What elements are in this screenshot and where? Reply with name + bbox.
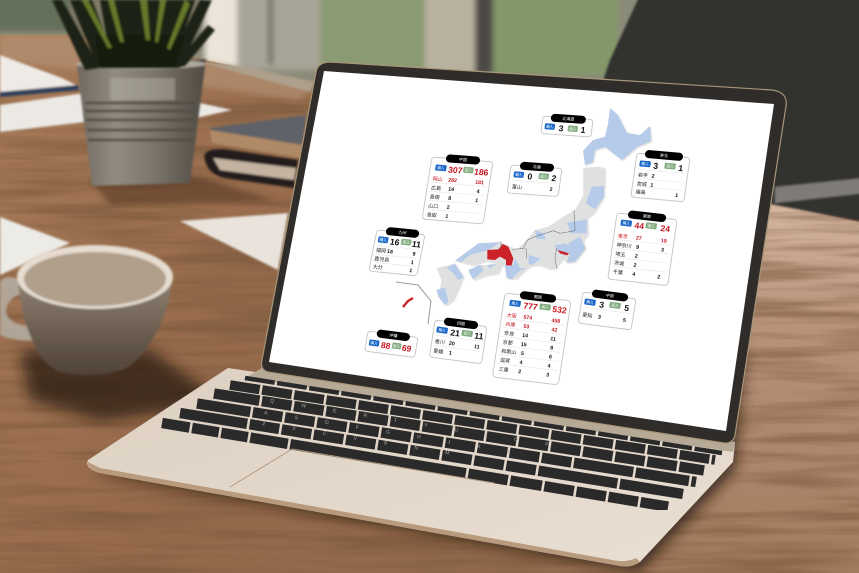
card: chugoku: 14 [448,187,454,193]
card: tohoku: 1 [675,193,678,199]
card: kanto: 返入 [647,223,656,229]
dark office chair [600,0,859,222]
card: kanto: 4 [632,272,636,278]
card: kyushu [369,226,426,276]
card: kanto [608,209,678,286]
card: okinawa: 88 [380,340,391,351]
card: kansai: 5 [520,351,524,357]
region borders [501,210,575,268]
card: tohoku: 東北 [660,152,668,158]
chugoku blue [455,243,500,262]
card: chugoku: 島根 [429,193,440,201]
card: chubu: 愛知 [582,311,593,320]
card: kanto: 購入 [622,220,631,226]
card: kansai: 関西 [534,293,543,300]
card: tohoku: 1 [650,183,654,189]
card: chubu: 3 [597,314,601,321]
card: chubu: 購入 [586,299,594,305]
card: shikoku: 返入 [463,330,471,336]
card: hokuriku: 2 [551,173,557,183]
card: kyushu: 9 [412,252,416,258]
card: kansai: 777 [523,300,539,312]
card: kansai: 574 [523,315,533,322]
card: hokuriku: 購入 [515,172,523,177]
card: hokkaido: 返入 [569,126,577,131]
card: chugoku: 岡山 [432,175,443,183]
card: okinawa: 返入 [393,343,401,349]
card: kansai: 14 [522,333,528,339]
card: tohoku: 購入 [641,161,649,167]
laptop lid [262,62,786,443]
coffee mug [0,245,230,420]
card: chubu: 5 [624,303,630,313]
trackpad outline [230,449,494,487]
card: hokkaido [541,113,593,137]
card: kyushu: 鹿児島 [374,255,390,264]
card: kansai: 兵庫 [505,321,516,329]
card: chugoku: 8 [448,196,452,202]
card: hokkaido: 購入 [546,124,554,129]
card: kansai: 奈良 [504,330,515,338]
card: kansai: 滋賀 [500,357,511,365]
card: chugoku: 2 [446,205,450,211]
card: kyushu: 返入 [402,239,411,245]
bright leaves [82,0,190,50]
chugoku red [487,244,513,265]
card: kansai: 4 [547,363,551,370]
card: kansai: 返入 [541,304,549,310]
hinge strip [245,368,735,452]
card: kyushu: 福岡 [375,247,387,255]
card: chubu: 5 [622,318,626,324]
card: okinawa: 購入 [370,340,379,346]
card: kansai: 2 [518,369,522,375]
card: okinawa: 69 [401,343,412,354]
card: chubu: 返入 [611,302,619,308]
card: tohoku: 福島 [635,188,646,196]
card: kanto: 19 [660,238,667,245]
card: kansai: 15 [520,342,527,348]
card: kyushu: 11 [411,239,422,250]
keyboard legends: QWERTYUIOP [270,398,576,452]
card: kanto: 千葉 [612,268,623,277]
card: shikoku: 香川 [434,338,445,346]
card: kansai: 京都 [502,340,513,347]
card: shikoku: 11 [474,344,480,351]
card: kanto: 2 [633,263,637,269]
dark leaves [52,0,215,70]
card: chugoku: 307 [447,165,463,176]
card: hokuriku [507,161,563,197]
card: chugoku: 4 [476,189,480,195]
card: kyushu: 大分 [372,263,383,271]
kanto north blue [567,219,587,233]
card: kansai: 三重 [498,366,509,374]
japan map [437,108,651,305]
laptop shadow on table [95,340,745,572]
card: kanto: 茨城 [614,259,625,268]
card: chugoku [422,153,494,224]
card: chugoku: 中国 [459,156,468,162]
card: kanto: 神奈川 [616,241,632,250]
card: hokuriku: 0 [527,171,533,182]
screen content [365,108,691,385]
card: okinawa: 沖縄 [389,331,398,338]
card: chugoku: 181 [475,180,484,186]
card: kanto: 9 [636,245,639,251]
card: kansai: 6 [548,354,552,361]
card: shikoku: 四国 [457,319,466,326]
card: hokkaido: 北海道 [562,115,575,122]
card: hokkaido: 3 [558,123,564,134]
card: okinawa [365,328,419,358]
card: shikoku: 20 [448,341,455,347]
card: kanto: 関東 [643,212,651,219]
tokai blue [555,243,571,255]
card: kansai: 42 [551,327,558,334]
plant in metal pot [52,0,275,205]
card: chubu [578,288,637,330]
card: kyushu: 購入 [379,237,388,243]
card: chugoku: 1 [475,198,479,204]
card: tohoku: 返入 [666,163,674,169]
card: shikoku: 11 [474,330,484,342]
card: hokuriku: 北陸 [533,163,541,170]
card: shikoku: 21 [450,327,461,338]
card: chugoku: 鳥取 [426,211,437,219]
card: tohoku [631,149,691,202]
keyboard [162,378,722,507]
inset frame line [396,282,431,324]
card: chugoku: 1 [445,214,449,220]
card: kansai: 購入 [511,300,519,306]
card: hokuriku: 2 [549,187,553,193]
kyushu [437,263,463,305]
card: chugoku: 山口 [428,202,439,210]
stacked notebooks [204,115,306,188]
card: kyushu: 九州 [398,229,407,235]
card: kyushu: 16 [389,237,401,247]
card: kansai: 8 [550,345,554,352]
kanto blue [567,237,586,263]
card: hokuriku: 富山 [512,183,522,191]
card: kansai: 3 [546,372,550,379]
card: kansai: 大阪 [506,312,517,320]
card: kansai: 4 [519,360,523,366]
card: shikoku: 購入 [438,327,446,333]
card: kansai: 458 [551,318,561,325]
card: kanto: 埼玉 [615,250,626,259]
background: blurred room and window [0,0,859,110]
card: kanto: 3 [661,247,664,254]
card: kyushu: 1 [409,268,413,274]
card: tohoku: 2 [651,174,655,180]
laptop base [87,368,735,566]
card: chugoku: 186 [473,167,489,178]
honshu [455,167,605,278]
tohoku blue [586,186,604,209]
shikoku [468,265,502,280]
card: kanto: 44 [634,220,645,231]
card: kanto: 東京 [617,232,628,241]
card: shikoku: 愛媛 [433,347,444,356]
papers on the desk [0,55,288,275]
card: chubu: 中部 [606,292,615,299]
card: kansai [492,289,572,385]
card: kansai: 和歌山 [501,348,517,356]
card: hokkaido: 1 [580,125,586,135]
card: chugoku: 282 [448,178,457,184]
card: shikoku: 1 [448,350,452,357]
hokkaido [583,108,651,165]
card: kyushu: 1 [410,260,414,266]
card: hokuriku: 返入 [540,174,548,179]
hokuriku blue [535,230,546,239]
card: tohoku: 岩手 [638,171,648,179]
kansai blue [505,258,527,279]
keyboard legends: ASDFGHJKL [264,410,538,459]
card: chugoku: 返入 [464,167,473,173]
card: chugoku: 広島 [431,184,442,192]
chubu blue [528,255,541,265]
card: kansai: 532 [552,304,568,316]
card: kyushu: 16 [386,249,393,255]
card: chubu: 3 [599,299,605,310]
tokyo red [558,250,569,255]
card: kanto: 24 [660,223,671,234]
okinawa inset [396,282,431,324]
card: chugoku: 購入 [437,165,445,171]
card: kanto: 27 [635,235,642,242]
card: tohoku: 宮城 [636,180,647,188]
card: shikoku [429,316,488,364]
okinawa island [403,298,413,307]
card: kansai: 11 [550,336,556,343]
card: kanto: 2 [634,254,638,260]
screen [269,71,774,431]
card: kanto: 2 [657,274,661,281]
keyboard legends: ZXCVBNM [262,421,477,461]
card: kansai: 53 [523,324,530,330]
card: tohoku: 1 [678,163,684,173]
card: tohoku: 3 [653,161,659,171]
